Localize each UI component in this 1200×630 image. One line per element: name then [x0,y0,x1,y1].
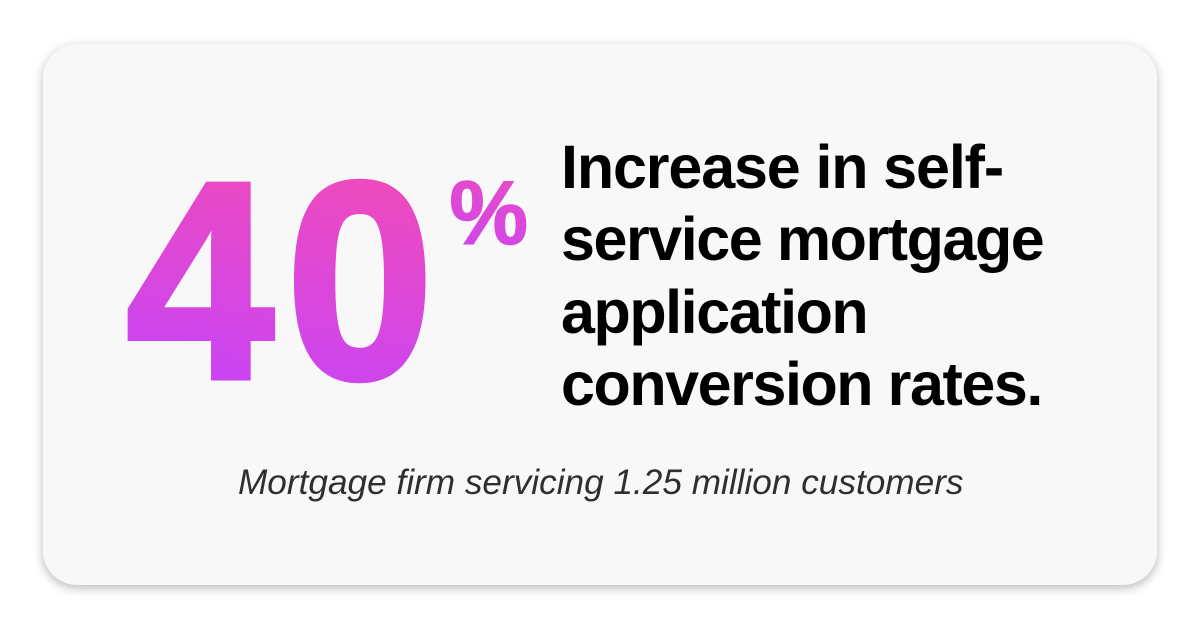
heading: stat description: Increase in self- [561,132,1003,200]
heading: stat description: application [561,278,867,346]
panel: stat card [43,44,1157,585]
heading: stat description [561,132,1043,418]
heading: stat description: conversion rates. [561,350,1042,418]
caption: source: Mortgage firm servicing 1.25 million customers [238,463,964,502]
percent sign: % [450,162,528,263]
heading: stat description: service mortgage [561,205,1043,273]
number 40: 40 [126,124,446,439]
